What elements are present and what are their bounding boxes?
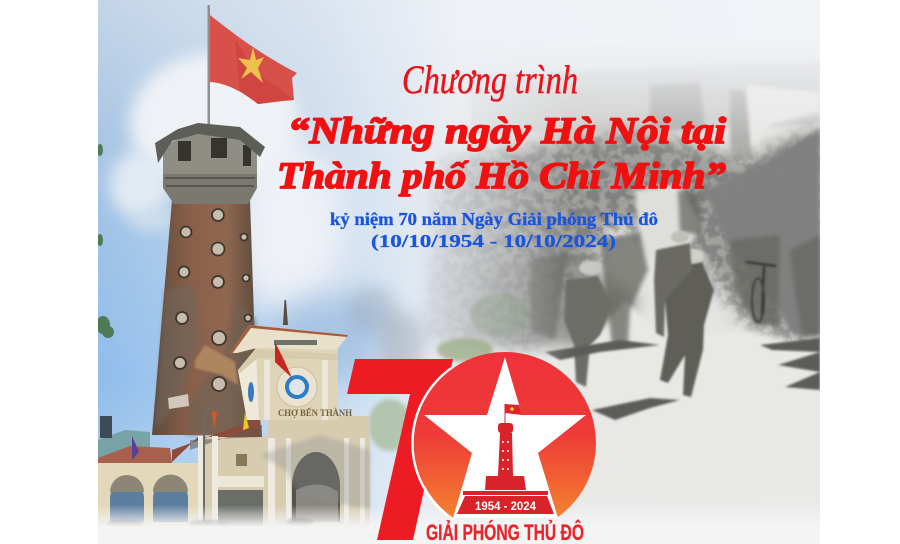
red-orange circle <box>414 352 596 534</box>
bicycle <box>746 262 776 315</box>
roof slant <box>172 418 262 462</box>
flag pole <box>208 5 210 125</box>
photo base tone <box>462 124 820 498</box>
red flag <box>275 342 292 378</box>
faded historical photo of marching soldiers <box>420 62 820 514</box>
spire <box>283 300 288 325</box>
cornice band <box>238 349 338 373</box>
soldier: second <box>564 261 612 387</box>
gallery <box>163 132 257 174</box>
logo years: 1954 - 2024 <box>475 499 536 513</box>
subtitle <box>330 209 658 252</box>
clock tower body <box>238 348 338 420</box>
Vietnamese flag on pole <box>208 5 297 125</box>
logo flag <box>504 404 522 424</box>
flags on roof <box>212 411 217 430</box>
left wing roof <box>98 446 172 463</box>
logo: 70 years liberation <box>347 352 596 544</box>
tower eave <box>230 325 348 353</box>
lamp post <box>204 408 211 522</box>
subtitle line 1: kỷ niệm 70 năm Ngày Giải phóng Thủ đô <box>330 209 658 229</box>
Hanoi flag tower <box>152 123 265 435</box>
upper facade lintel <box>268 416 370 438</box>
Ben Thanh market <box>98 300 370 528</box>
white pilasters <box>198 436 365 523</box>
light area in upper right <box>745 85 820 150</box>
background buildings <box>98 430 150 458</box>
market sign: CHỢ BẾN THÀNH <box>278 406 353 419</box>
left wing arches <box>110 492 188 522</box>
title line 1: “Những ngày Hà Nội tại <box>288 111 727 152</box>
roof <box>155 123 265 163</box>
bottom white fade <box>98 505 820 544</box>
white columns <box>264 360 328 420</box>
crowd and trees mass <box>420 125 820 345</box>
white ring separator <box>413 367 453 515</box>
road shadows <box>545 338 820 420</box>
ink wash overlay on market <box>260 435 370 510</box>
clock tower side face <box>238 352 259 420</box>
left tree leaves <box>98 144 114 338</box>
main title <box>277 111 727 197</box>
central wall <box>198 436 370 528</box>
logo tower <box>457 423 554 514</box>
motorbikes at street <box>107 518 314 528</box>
corbel band <box>163 172 257 204</box>
road <box>590 302 814 358</box>
purple flag <box>132 436 139 460</box>
soldiers <box>564 231 776 397</box>
numeral seven <box>347 359 453 540</box>
side clock <box>248 382 254 402</box>
white star <box>424 357 586 518</box>
foliage green <box>368 293 530 451</box>
upper distant buildings <box>473 76 820 134</box>
left wing wall <box>98 463 202 527</box>
soldier: foreground <box>660 249 714 397</box>
soldier: third <box>654 231 692 337</box>
main clock <box>277 367 317 407</box>
title line 2: Thành phố Hồ Chí Minh” <box>277 156 726 197</box>
flag star <box>238 47 264 83</box>
tower body <box>152 200 258 435</box>
rosette windows <box>174 209 252 391</box>
big arch <box>292 452 340 522</box>
subtitle line 2: (10/10/1954 - 10/10/2024) <box>371 231 616 252</box>
programme label: Chương trình <box>402 57 578 102</box>
background figures <box>530 190 820 345</box>
crowd texture <box>430 130 820 345</box>
flag cloth <box>210 15 297 104</box>
stone plaque <box>168 394 189 409</box>
